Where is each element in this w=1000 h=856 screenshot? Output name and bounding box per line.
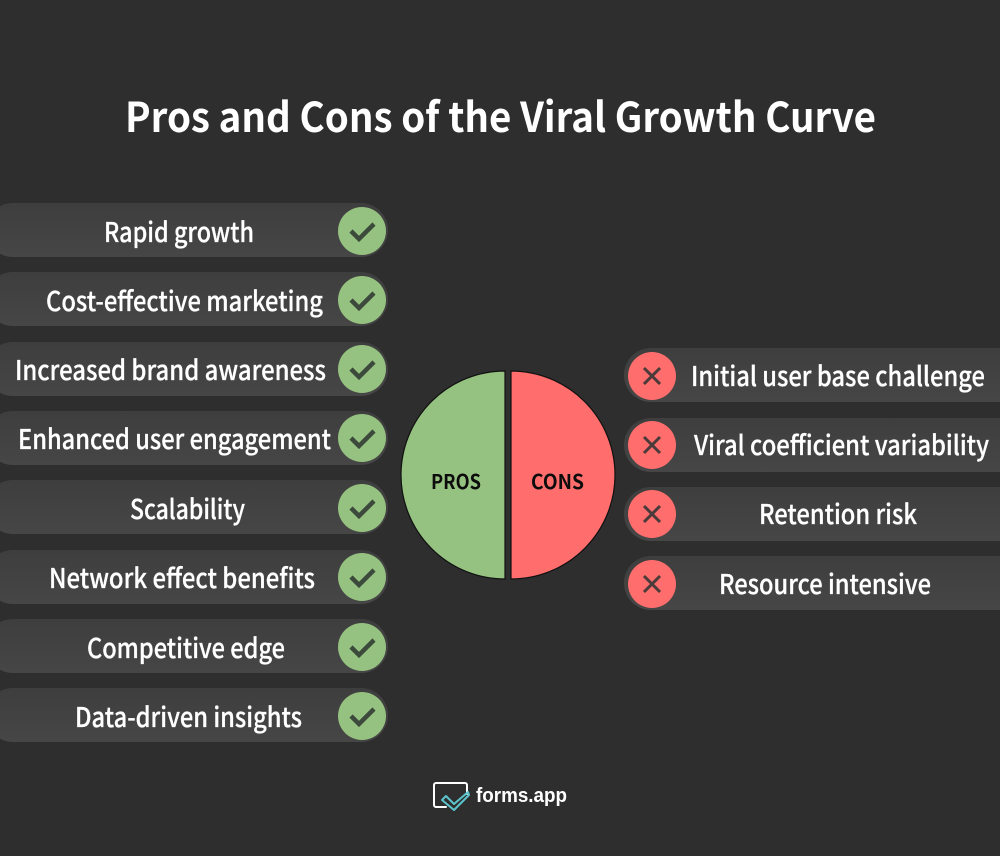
icon: forms.app mark — [434, 783, 469, 810]
panel: pros list — [0, 203, 388, 742]
pro item: Competitive edge: Competitive edge — [87, 627, 285, 666]
con item: Resource intensive: Resource intensive — [719, 563, 931, 602]
con item: Resource intensive — [624, 556, 1000, 610]
logo: forms.app — [434, 783, 567, 810]
pro item: Competitive edge — [0, 619, 388, 673]
con item: Initial user base challenge — [624, 348, 1000, 402]
pro item: Data-driven insights: Data-driven insights — [75, 696, 302, 735]
pro item: Scalability — [0, 480, 388, 534]
panel: cons list — [624, 348, 1000, 610]
pro item: Scalability: Scalability — [130, 488, 245, 527]
pro item: Increased brand awareness: Increased brand awareness — [15, 349, 326, 388]
cons half — [511, 371, 615, 579]
con item: Retention risk — [624, 487, 1000, 541]
pro item: Data-driven insights — [0, 688, 388, 742]
pros label: PROS — [431, 466, 481, 495]
title: Pros and Cons of the Viral Growth Curve — [125, 84, 876, 144]
pro item: Network effect benefits — [0, 550, 388, 604]
pro item: Enhanced user engagement — [0, 411, 388, 465]
pro item: Cost-effective marketing: Cost-effective marketing — [46, 280, 323, 319]
pro item: Enhanced user engagement: Enhanced user engagement — [18, 418, 331, 457]
cons label: CONS — [531, 466, 584, 495]
pros half — [401, 371, 505, 579]
pro item: Rapid growth — [0, 203, 388, 257]
con item: Viral coefficient variability — [624, 418, 1000, 472]
wordmark: forms.app — [476, 785, 567, 807]
pro item: Increased brand awareness — [0, 342, 388, 396]
pro item: Network effect benefits: Network effect benefits — [49, 557, 315, 596]
pro item: Rapid growth: Rapid growth — [104, 211, 254, 250]
chart: pros and cons circle — [401, 371, 615, 579]
con item: Retention risk: Retention risk — [759, 493, 917, 532]
pro item: Cost-effective marketing — [0, 272, 388, 326]
